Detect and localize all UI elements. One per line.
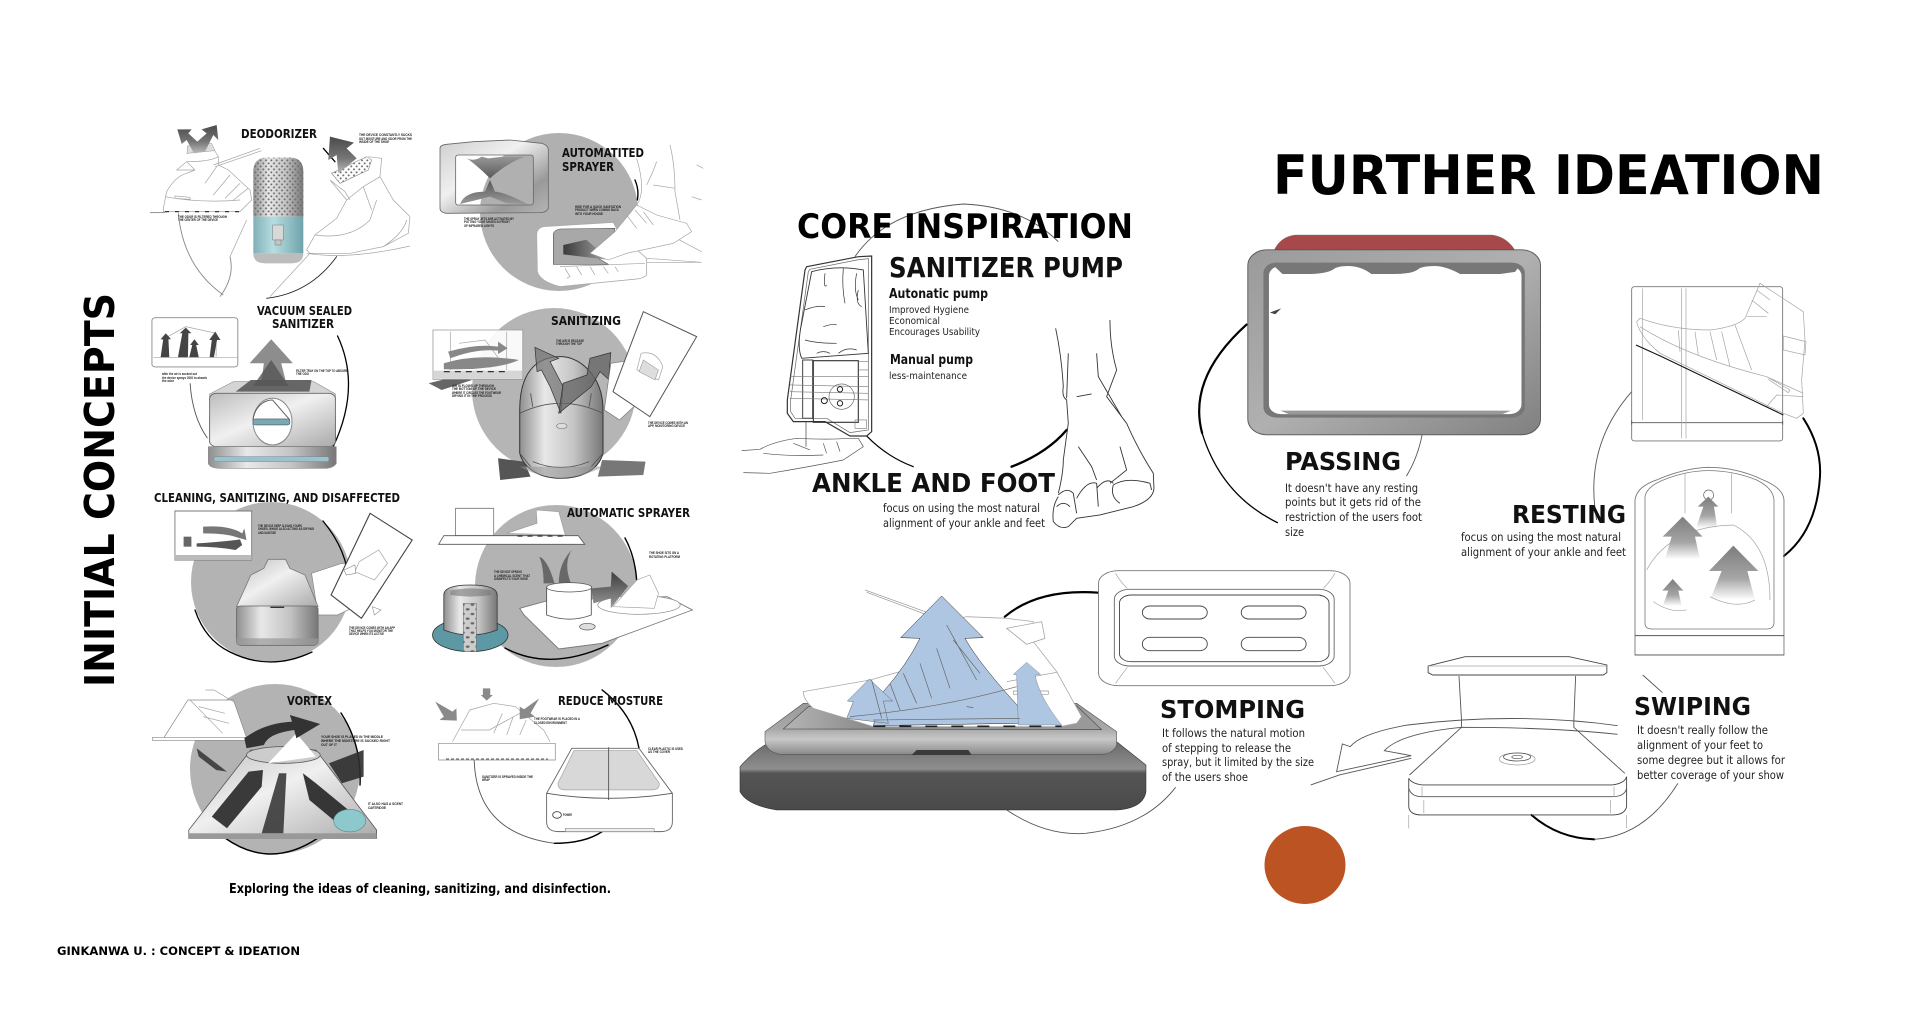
panel: vacuum sealed sanitizer: FILTER TRAY ON THE TOP TO ABSORB bbox=[296, 368, 348, 373]
panel: vortex: CARTRIDGE bbox=[368, 805, 386, 810]
text: passing: size bbox=[1285, 525, 1304, 539]
label: automated sprayer: AUTOMATITED bbox=[562, 146, 644, 160]
icon: deodorizer cylinder bbox=[253, 158, 303, 263]
text: stomping: spray, but it limited by the size bbox=[1162, 755, 1314, 769]
panel: vacuum sealed sanitizer: after the air is sucked out bbox=[162, 371, 197, 376]
panel: stomping bbox=[740, 571, 1350, 834]
text: swiping: It doesn't really follow the bbox=[1637, 723, 1768, 737]
icon: red top bbox=[1274, 235, 1515, 251]
icon: foot bbox=[1053, 320, 1154, 528]
panel: automated sprayer bbox=[440, 133, 703, 291]
text: automatic pump bbox=[889, 287, 988, 338]
panel: cleaning, sanitizing, disaffected: THE DEVICE DEEP CLEANS YOURS bbox=[258, 523, 302, 528]
text: stomping bbox=[1162, 726, 1314, 784]
panel: reduce moisture: SANITIZER IS SPRAYED INSIDE THE bbox=[482, 774, 533, 779]
orange circle bbox=[1264, 826, 1346, 904]
note: deodorizer suction: THE DEVICE CONSTANTLY SUCKS bbox=[359, 132, 412, 137]
panel: cleaning, sanitizing, disaffected: DEVICE WHEN ITS ACTIVE bbox=[349, 631, 384, 636]
label: automated sprayer: SPRAYER bbox=[562, 160, 614, 174]
icon: inclined box with shoe bbox=[1632, 283, 1806, 441]
panel: sanitizing: AIR IS FLOWS UP THROUGH bbox=[452, 383, 494, 388]
panel: sanitizing bbox=[429, 308, 697, 480]
panel: vortex bbox=[152, 684, 403, 854]
icon: upper platform bbox=[765, 703, 1117, 755]
heading: ankle and foot: ANKLE AND FOOT bbox=[812, 469, 1055, 499]
label: vacuum sealed sanitizer: VACUUM SEALED bbox=[257, 304, 352, 318]
text: passing: It doesn't have any resting bbox=[1285, 481, 1418, 495]
label: cleaning, sanitizing, and disaffected: CLEANING, SANITIZING, AND DISAFFECTED bbox=[154, 491, 400, 505]
icon: sanitizer pump bbox=[787, 256, 872, 447]
panel: sanitizing: DRYING IT IN THE PROCESS bbox=[452, 393, 492, 398]
text: automatic pump: Improved Hygiene bbox=[889, 305, 969, 316]
text: stomping: of stepping to release the bbox=[1162, 741, 1291, 755]
panel: reduce moisture: CLEAR PLASTIC IS USED bbox=[648, 746, 683, 751]
panel: reduce moisture: POWER bbox=[563, 812, 572, 817]
heading: stomping: STOMPING bbox=[1160, 695, 1305, 724]
text: automatic pump: Autonatic pump bbox=[889, 287, 988, 302]
caption: Exploring the ideas of cleaning, sanitizing, and disinfection. bbox=[229, 882, 611, 897]
text: swiping: some degree but it allows for bbox=[1637, 753, 1785, 767]
label: vacuum sealed sanitizer bbox=[257, 304, 352, 331]
panel: reduce moisture bbox=[435, 688, 683, 843]
icon: lower platform bbox=[740, 742, 1146, 810]
heading: core inspiration: CORE INSPIRATION bbox=[797, 207, 1133, 247]
text: automatic pump: Economical bbox=[889, 316, 940, 327]
panel: reduce moisture: WRAP bbox=[482, 777, 490, 782]
panel: vacuum sealed sanitizer: the device sprays ODO to absorb bbox=[162, 375, 207, 380]
panel: automated sprayer: INTO YOUR HOUSE bbox=[575, 211, 603, 216]
panel: sanitizing: WHERE IT CIRCLES THE FOOTWEAR bbox=[452, 390, 501, 395]
panel: vacuum sealed sanitizer: THE ODO bbox=[296, 371, 309, 376]
panel: sanitizing: THE BOTTOM OF THE DEVICE bbox=[452, 386, 496, 391]
text: passing bbox=[1285, 481, 1422, 539]
credit: GINKANWA U. : CONCEPT & IDEATION bbox=[57, 944, 300, 958]
text: ankle and foot: focus on using the most natural bbox=[883, 501, 1040, 515]
icon: passing frame bbox=[1248, 250, 1541, 435]
label: vacuum sealed sanitizer: SANITIZER bbox=[272, 317, 334, 331]
icon: swiping device bbox=[1409, 657, 1627, 828]
text: swiping: better coverage of your show bbox=[1637, 768, 1784, 782]
icon: shoe spray box bbox=[537, 205, 692, 287]
heading: resting: RESTING bbox=[1512, 500, 1626, 529]
panel: swiping bbox=[1311, 657, 1785, 839]
label: sanitizing: SANITIZING bbox=[551, 314, 621, 328]
panel: sanitizing: THE AIR IS RELEASE bbox=[556, 338, 584, 343]
panel: vortex: WHERE THE MOISTURE IS SUCKED RIGHT bbox=[321, 738, 390, 743]
panel: automated sprayer: PUTTING YOUR SHOES IN FRONT bbox=[464, 219, 510, 224]
panel: vacuum sealed sanitizer bbox=[152, 304, 352, 468]
label: automated sprayer bbox=[562, 146, 644, 174]
panel: automatic sprayer bbox=[433, 505, 692, 667]
panel: vacuum sealed sanitizer: the odor bbox=[162, 378, 174, 383]
panel: passing bbox=[1199, 235, 1541, 539]
panel: automated sprayer: PRODUCT WHEN COMING BACK bbox=[575, 207, 619, 212]
panel: automated sprayer: THE SPRAY JETS ARE ACTIVATED BY bbox=[464, 216, 514, 221]
panel: automatic sprayer: A CHEMICAL SCENT THAT bbox=[494, 573, 530, 578]
label: automatic sprayer: AUTOMATIC SPRAYER bbox=[567, 506, 690, 520]
text: manual pump: less-maintenance bbox=[889, 371, 967, 382]
icon: left shoe bbox=[150, 125, 310, 297]
panel: automated sprayer: HIDE FOR A QUICK SANITATION bbox=[575, 204, 621, 209]
icon: shoe bbox=[803, 617, 1082, 727]
heading: further ideation: FURTHER IDEATION bbox=[1273, 144, 1824, 207]
panel: sanitizing: THROUGH THE TOP bbox=[556, 341, 582, 346]
heading: passing: PASSING bbox=[1285, 447, 1401, 476]
heading: sanitizer pump: SANITIZER PUMP bbox=[889, 251, 1123, 284]
panel: deodorizer: OUT MOISTURE AND ODOR FROM THE bbox=[359, 136, 412, 141]
heading: initial concepts: INITIAL CONCEPTS bbox=[76, 293, 124, 687]
panel: deodorizer: INSIDE OF THE SHOE bbox=[359, 139, 389, 144]
text: manual pump bbox=[889, 353, 973, 382]
panel: sanitizing: THE DEVICE COMES WITH AN bbox=[648, 420, 688, 425]
panel: cleaning, sanitizing, disaffected: THE DEVICE COMES WITH AN APP bbox=[349, 625, 395, 630]
icon: blue arrows bbox=[847, 596, 1062, 726]
text: passing: points but it gets rid of the bbox=[1285, 495, 1421, 509]
icon: spray frame bbox=[440, 140, 548, 213]
panel: deodorizer: THE CENTER OF THE DEVICE bbox=[178, 217, 218, 222]
text: stomping: of the users shoe bbox=[1162, 770, 1248, 784]
text: ankle and foot bbox=[883, 501, 1045, 530]
icon: top view with arrows bbox=[1635, 467, 1784, 655]
panel: automatic sprayer: DISINFECTS YOUR SHOE bbox=[494, 576, 528, 581]
panel: sanitizing: APP, MONITORING DEVICE bbox=[648, 423, 685, 428]
panel: vortex: IT ALSO HAS A SCENT bbox=[368, 801, 403, 806]
text: resting bbox=[1461, 530, 1626, 559]
text: automatic pump: Encourages Usability bbox=[889, 327, 980, 338]
panel: cleaning, sanitizing, disaffected bbox=[154, 491, 412, 662]
panel: deodorizer: THE ODOR IS FILTERED THROUGH bbox=[178, 214, 227, 219]
panel: reduce moisture: CLOSED ENVIRONMENT bbox=[534, 720, 567, 725]
icon: top view bbox=[1099, 571, 1350, 686]
text: swiping bbox=[1637, 723, 1785, 782]
panel: resting bbox=[1461, 283, 1820, 655]
icon: hand bbox=[742, 438, 863, 473]
icon: right shoe bbox=[307, 137, 410, 255]
panel: core inspiration bbox=[742, 204, 1154, 530]
panel: automated sprayer: OF INFRARED LIGHTS bbox=[464, 223, 494, 228]
panel: cleaning, sanitizing, disaffected: THAT HELPS YOU MONITOR THE bbox=[349, 628, 393, 633]
label: deodorizer: DEODORIZER bbox=[241, 127, 317, 141]
panel: deodorizer bbox=[150, 125, 412, 298]
label: vortex: VORTEX bbox=[287, 694, 333, 708]
panel: vortex: YOUR SHOE IS PLACED IN THE MIDDLE bbox=[321, 734, 383, 739]
text: stomping: It follows the natural motion bbox=[1162, 726, 1305, 740]
text: passing: restriction of the users foot bbox=[1285, 510, 1422, 524]
text: resting: focus on using the most natural bbox=[1461, 530, 1621, 544]
heading: swiping: SWIPING bbox=[1634, 692, 1751, 721]
panel: vortex: OUT OF IT bbox=[321, 742, 337, 747]
panel: reduce moisture: THE FOOTWEAR IS PLACED IN A bbox=[534, 716, 580, 721]
panel: cleaning, sanitizing, disaffected: SHOES, WHILE ALSO ACTING AS DRYING bbox=[258, 526, 314, 531]
label: reduce mosture: REDUCE MOSTURE bbox=[558, 694, 663, 708]
text: manual pump: Manual pump bbox=[890, 353, 973, 368]
panel: reduce moisture: AS THE COVER bbox=[648, 749, 670, 754]
panel: automatic sprayer: THE DEVICE SPRAYS bbox=[494, 569, 522, 574]
panel: automatic sprayer: ROTATING PLATFORM bbox=[649, 554, 680, 559]
panel: automatic sprayer: THE SHOE SITS ON A bbox=[649, 550, 679, 555]
panel: cleaning, sanitizing, disaffected: AND SANITIZE bbox=[258, 530, 276, 535]
arrow: swipe direction bbox=[1311, 718, 1618, 785]
text: swiping: alignment of your feet to bbox=[1637, 738, 1763, 752]
text: resting: alignment of your ankle and feet bbox=[1461, 545, 1626, 559]
text: ankle and foot: alignment of your ankle and feet bbox=[883, 516, 1045, 530]
